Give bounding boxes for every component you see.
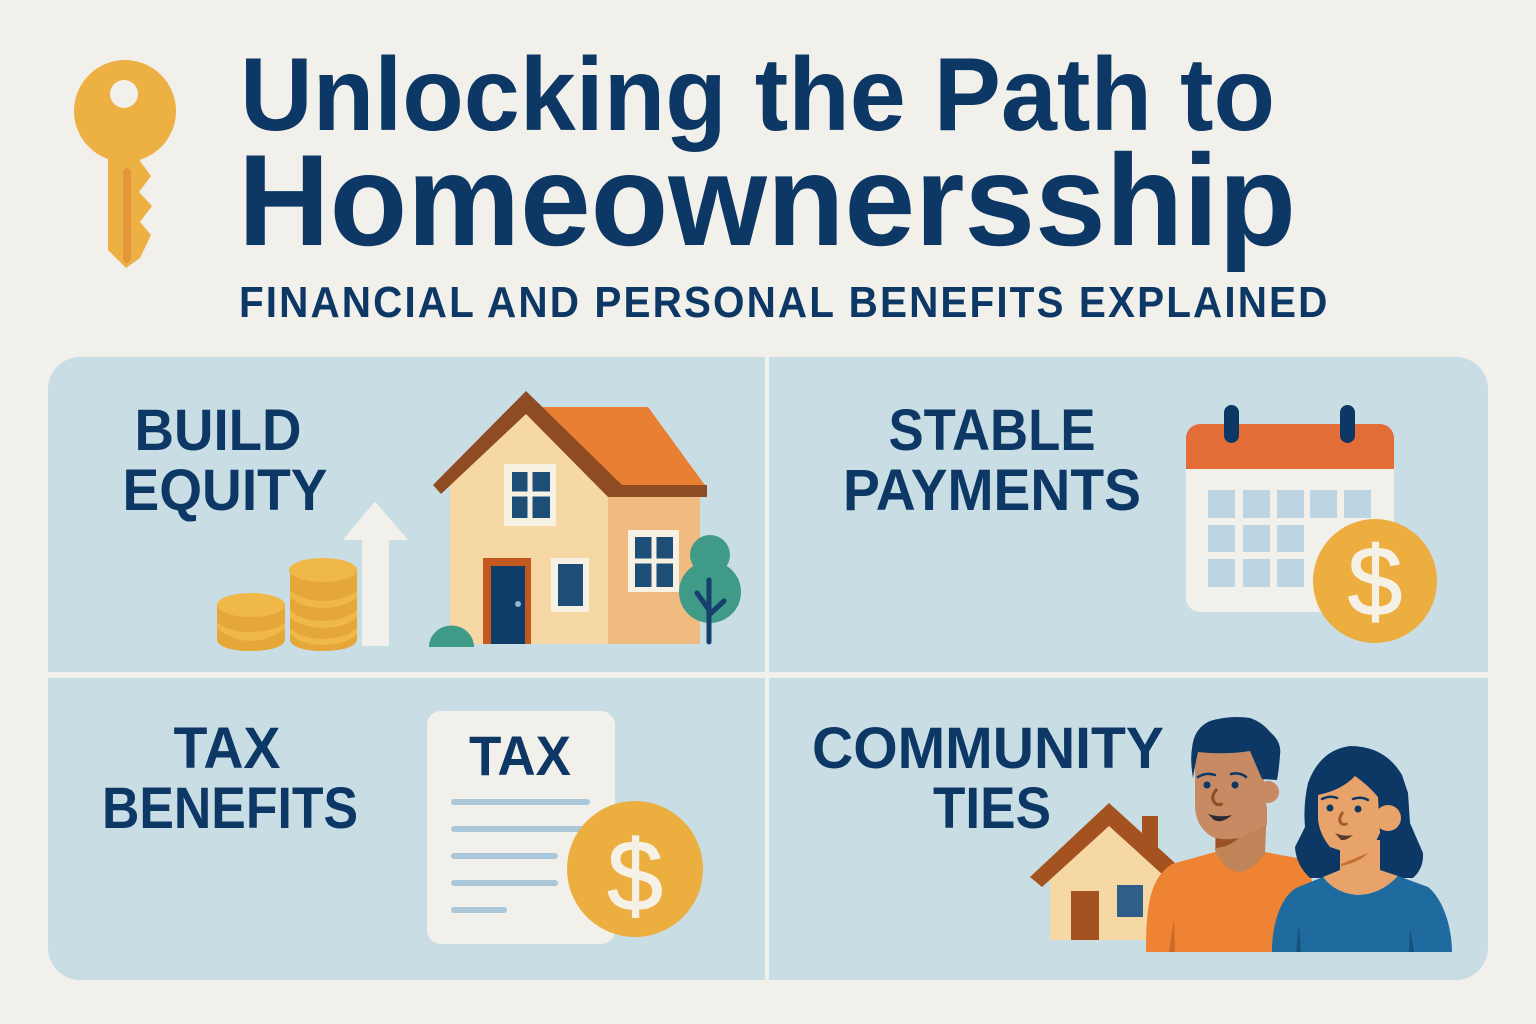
icon: dollar coin: $ — [607, 820, 663, 932]
icon: dollar coin — [1313, 519, 1437, 643]
icon: up arrow — [345, 503, 406, 645]
icon: coins — [217, 558, 357, 651]
icon: key — [74, 60, 176, 268]
heading: tax benefits: BENEFITS — [102, 776, 358, 841]
icon: tax document — [427, 711, 615, 944]
heading: stable payments: PAYMENTS — [843, 458, 1141, 523]
heading: stable payments: STABLE — [888, 398, 1096, 463]
heading: community ties: COMMUNITY — [812, 716, 1164, 781]
panel: stable payments — [843, 398, 1437, 643]
heading: tax benefits: TAX — [174, 716, 281, 781]
title — [238, 37, 1296, 273]
panel: build equity — [122, 391, 741, 651]
heading: build equity: BUILD — [134, 398, 302, 463]
icon: woman — [1272, 746, 1452, 952]
title: Unlocking the Path to — [240, 37, 1275, 153]
icon: small house — [1030, 803, 1175, 940]
panel: tax benefits — [102, 711, 703, 944]
icon: tax document: TAX — [469, 724, 571, 787]
icon: bush — [429, 626, 474, 647]
icon: tree — [679, 535, 741, 642]
title: Homeownersship — [238, 127, 1296, 273]
heading: build equity: EQUITY — [122, 458, 328, 523]
icon: man — [1146, 717, 1312, 952]
icon: house — [433, 391, 707, 644]
subtitle: FINANCIAL AND PERSONAL BENEFITS EXPLAINED — [239, 277, 1327, 326]
panel: community ties — [812, 716, 1452, 952]
heading: community ties: TIES — [933, 776, 1051, 841]
icon: calendar — [1186, 405, 1394, 612]
icon: dollar coin — [567, 801, 703, 937]
icon: dollar coin: $ — [1348, 526, 1402, 636]
panels background — [48, 357, 1488, 980]
